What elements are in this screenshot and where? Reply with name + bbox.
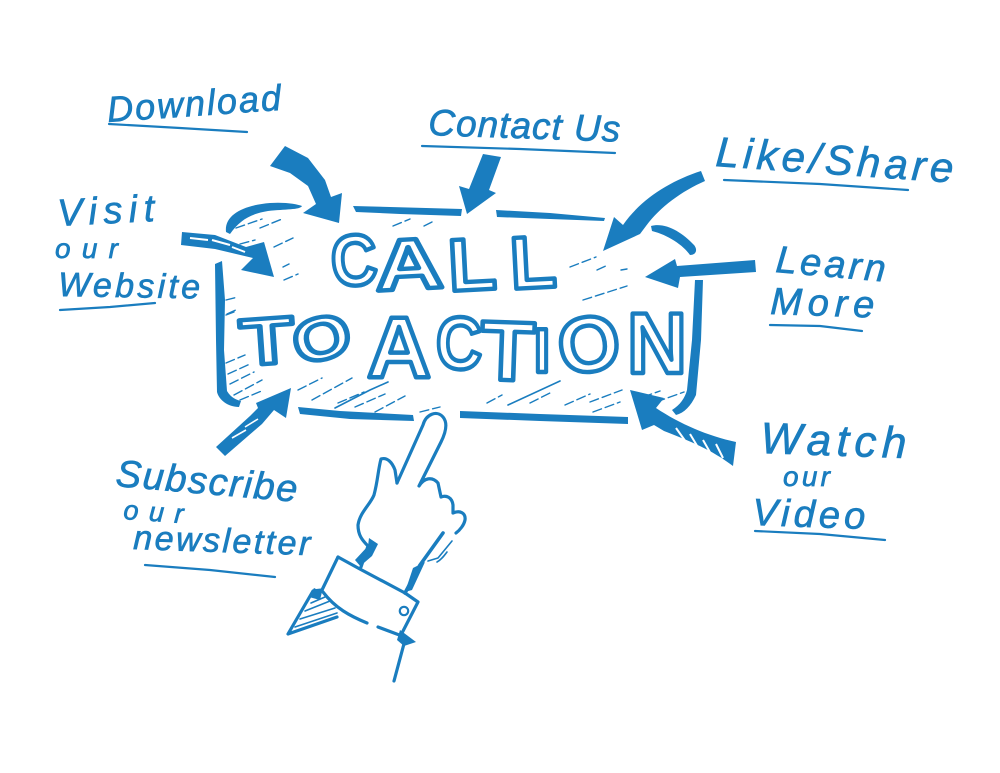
heading: CALL TO ACTION: T: [479, 303, 536, 399]
label: Watch our Video: Watch: [760, 414, 907, 468]
label: Subscribe our newsletter: [114, 453, 313, 577]
label: Download: Download: [106, 77, 283, 130]
label: Watch our Video: [752, 414, 907, 540]
arrow: from Contact Us: [459, 154, 501, 214]
label: Visit our Website: [55, 188, 201, 310]
heading: CALL TO ACTION: I: [534, 317, 550, 386]
arrow: from Subscribe: [216, 388, 291, 456]
label: Learn More: [770, 239, 887, 331]
shading hatch: [226, 219, 684, 412]
label: Subscribe our newsletter: newsletter: [133, 519, 313, 563]
heading: CALL TO ACTION: O: [552, 296, 626, 392]
heading: CALL TO ACTION: L: [508, 220, 558, 305]
label: Subscribe our newsletter: our: [123, 495, 186, 529]
label: Learn More: More: [770, 281, 875, 327]
heading: CALL TO ACTION: [238, 220, 687, 399]
icon: pointing hand: [288, 414, 465, 681]
label: Visit our Website: our: [55, 233, 120, 264]
label: Contact Us: Contact Us: [428, 102, 621, 150]
heading: CALL TO ACTION: N: [627, 296, 687, 392]
arrow: from Watch our Video: [630, 390, 736, 466]
heading: CALL TO ACTION: O: [285, 299, 358, 378]
heading: CALL TO ACTION: A: [367, 300, 431, 396]
arrow: from Like/Share: [603, 171, 705, 251]
heading: CALL TO ACTION: C: [436, 302, 482, 385]
arrow: from Learn More: [645, 259, 756, 288]
arrow: from Download: [270, 146, 342, 223]
label: Subscribe our newsletter: Subscribe: [114, 453, 299, 511]
heading: CALL TO ACTION: C: [328, 220, 380, 303]
label: Watch our Video: Video: [752, 492, 866, 538]
arrow: from Visit our Website: [181, 232, 274, 277]
label: Visit our Website: Website: [58, 266, 201, 306]
label: Watch our Video: our: [783, 461, 832, 492]
panel: sketched call to action box: [215, 203, 703, 424]
heading: CALL TO ACTION: T: [238, 302, 297, 380]
label: Learn More: Learn: [774, 239, 887, 291]
heading: CALL TO ACTION: A: [373, 223, 445, 307]
label: Visit our Website: Visit: [56, 188, 157, 235]
label: Like/Share: Like/Share: [714, 128, 955, 192]
heading: CALL TO ACTION: L: [446, 222, 498, 307]
